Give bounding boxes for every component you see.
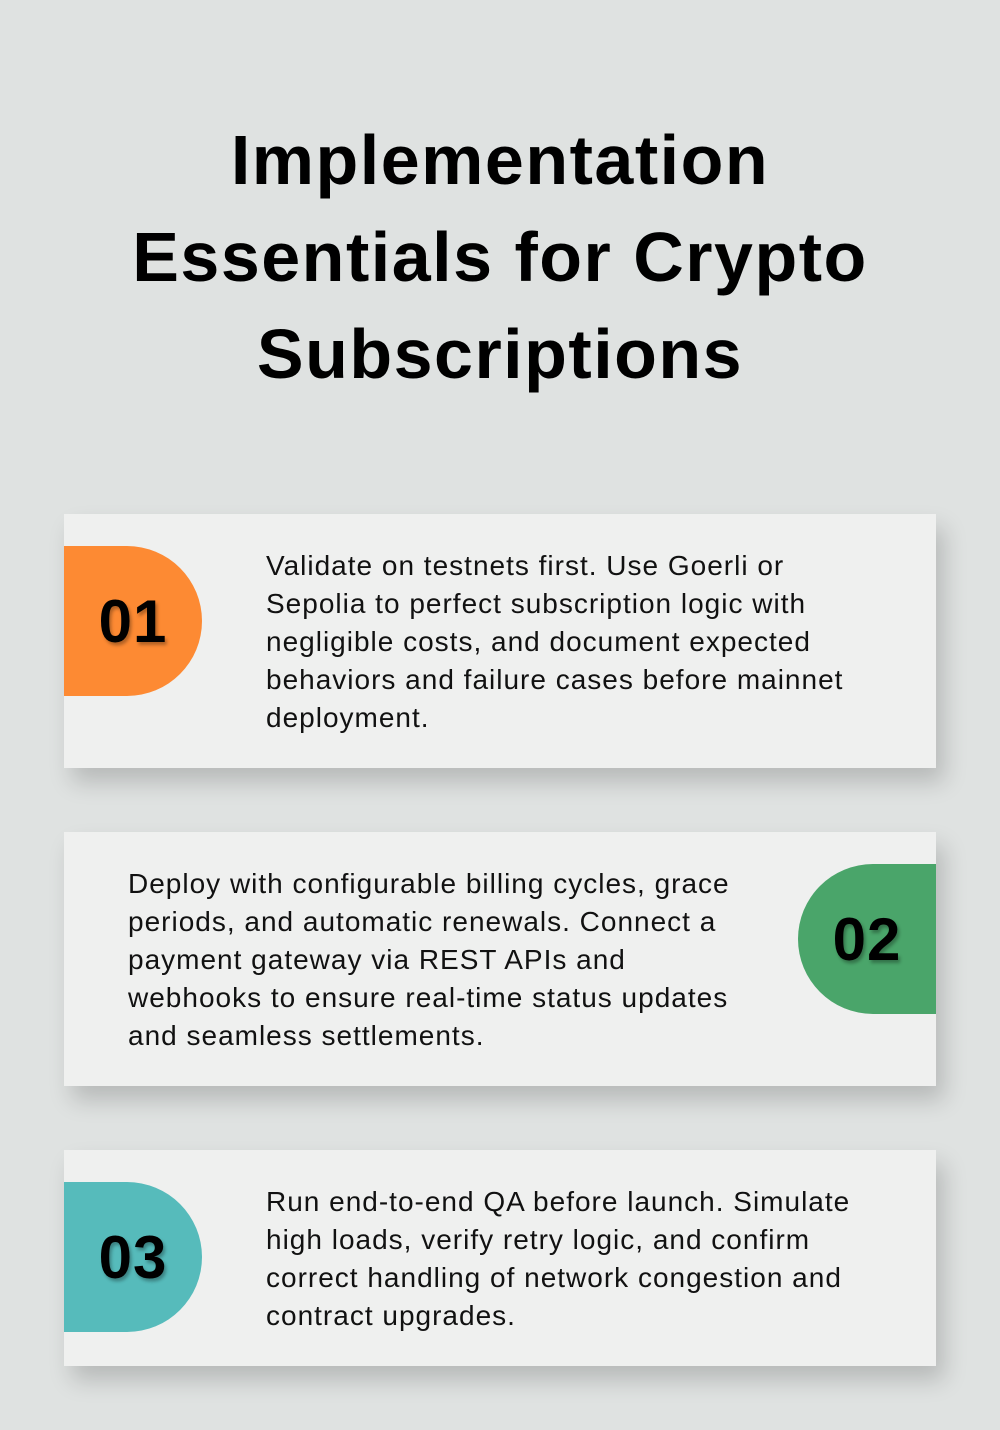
text: step 01: behaviors and failure cases before mainnet — [266, 664, 843, 695]
badge: 02 — [798, 864, 936, 1014]
text: step 02 — [128, 868, 730, 1051]
badge: 03: 03 — [99, 1224, 167, 1290]
text: step 03 — [266, 1186, 850, 1331]
text: step 01: deployment. — [266, 702, 430, 733]
badge: 01 — [64, 546, 202, 696]
title: Implementation — [231, 121, 769, 199]
title: Essentials for Crypto — [132, 218, 868, 296]
text: step 02: webhooks to ensure real-time status updates — [128, 982, 728, 1013]
text: step 03: high loads, verify retry logic, and confirm — [266, 1224, 810, 1255]
panel: step 02 — [64, 832, 936, 1086]
title: Subscriptions — [257, 315, 743, 393]
text: step 03: correct handling of network congestion and — [266, 1262, 842, 1293]
text: step 01 — [266, 550, 843, 733]
text: step 03: Run end-to-end QA before launch. Simulate — [266, 1186, 850, 1217]
text: step 02: and seamless settlements. — [128, 1020, 484, 1051]
panel: step 03 — [64, 1150, 936, 1366]
text: step 01: Validate on testnets first. Use Goerli or — [266, 550, 784, 581]
text: step 02: Deploy with configurable billing cycles, grace — [128, 868, 730, 899]
text: step 03: contract upgrades. — [266, 1300, 516, 1331]
text: step 02: periods, and automatic renewals. Connect a — [128, 906, 716, 937]
panel: step 01 — [64, 514, 936, 768]
text: step 01: Sepolia to perfect subscription logic with — [266, 588, 806, 619]
text: step 02: payment gateway via REST APIs and — [128, 944, 626, 975]
badge: 03 — [64, 1182, 202, 1332]
badge: 01: 01 — [99, 588, 167, 654]
title — [132, 121, 868, 393]
text: step 01: negligible costs, and document expected — [266, 626, 811, 657]
badge: 02: 02 — [833, 906, 901, 972]
